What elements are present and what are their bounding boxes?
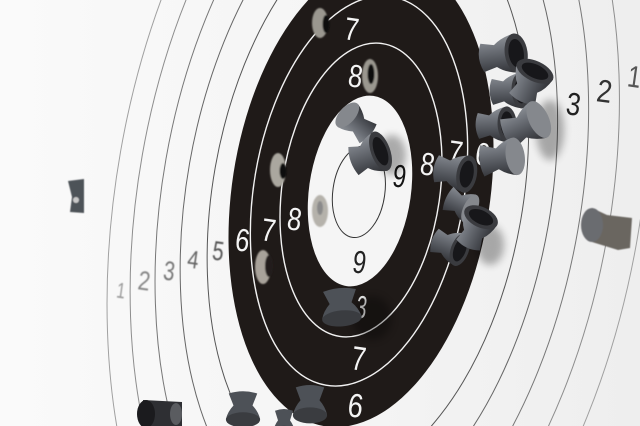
target numbers: 3 [564, 87, 583, 124]
white ring line 7 [222, 0, 496, 403]
target numbers: 8 [285, 202, 304, 239]
blurred left numbers: 4 [186, 245, 201, 274]
white ring line 8 [262, 32, 460, 348]
target numbers: 6 [233, 223, 252, 260]
pellet cluster: upper right [475, 32, 557, 180]
target numbers [233, 12, 640, 426]
pellet: far left on wall [68, 179, 84, 213]
pellet shadows [352, 100, 564, 340]
target numbers: 6 [473, 137, 492, 174]
target numbers: 6 [345, 387, 366, 426]
black target disc [197, 0, 525, 426]
target numbers: 7 [349, 340, 368, 379]
shot holes [255, 8, 378, 284]
pellet: bottom of ring [320, 286, 362, 328]
white centre [296, 89, 424, 293]
pellets: bottom edge [137, 385, 327, 426]
blurred left numbers: 1 [115, 279, 127, 304]
target numbers: 2 [594, 73, 614, 111]
blurred left numbers: 3 [161, 256, 177, 288]
blurred left numbers: 2 [136, 266, 152, 297]
target numbers: 9 [390, 157, 409, 195]
pellet: blurred right [581, 208, 632, 250]
pellet cluster: lower right [426, 150, 502, 269]
pellet: centre [331, 98, 397, 181]
blurred left numbers: 5 [210, 236, 226, 268]
target numbers: 7 [259, 213, 278, 250]
target numbers: 9 [350, 243, 369, 281]
target numbers: 8 [418, 147, 437, 184]
target numbers: 7 [446, 135, 465, 172]
target numbers: 3 [354, 288, 369, 326]
blurred left numbers [115, 236, 226, 304]
target numbers: 7 [342, 12, 361, 49]
target numbers: 8 [346, 59, 365, 96]
